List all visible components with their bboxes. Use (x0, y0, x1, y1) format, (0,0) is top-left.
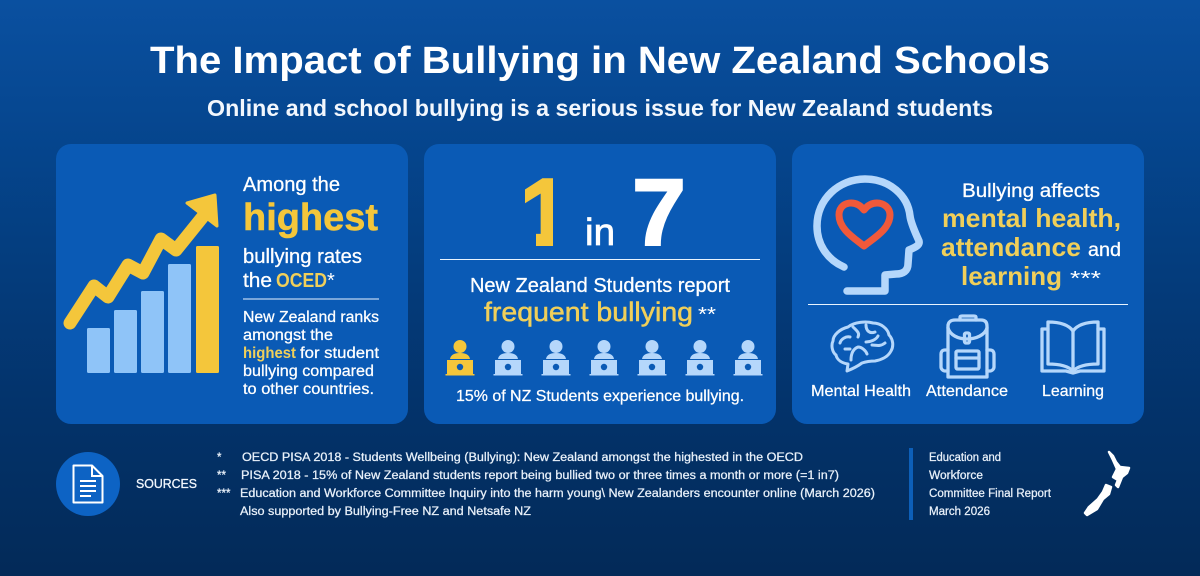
heading: affects (941, 180, 1121, 291)
statistic: 1 in 7: 1 (520, 160, 573, 266)
heading: among the highest: the (243, 270, 272, 292)
report reference (929, 452, 1052, 518)
source list: PISA 2018 - 15% of New Zealand students report being bullied two or three times a month or more (=1 in7) (241, 470, 839, 482)
heading: affects: learning (961, 261, 1062, 291)
panel: what bullying affects (792, 144, 1144, 424)
statistic: 1 in 7 (525, 178, 683, 246)
body text: ranks: for student (300, 345, 380, 362)
body text: ranks (243, 309, 380, 398)
text: frequent bullying (470, 275, 730, 327)
icon: sources document (56, 452, 120, 516)
report reference: Committee Final Report (929, 488, 1052, 500)
statistic: 1 in 7: 7 (632, 160, 686, 266)
title: The Impact of Bullying in New Zealand Schools (150, 40, 1050, 82)
body text: ranks: highest (243, 345, 296, 362)
source list: Education and Workforce Committee Inquiry into the harm young\ New Zealanders encounter online (March 2026) (240, 488, 875, 500)
source list: * (217, 452, 222, 464)
source list: *** (217, 488, 231, 500)
heading: affects: mental health, (942, 203, 1121, 233)
report reference: Education and (929, 452, 1001, 464)
body text: ranks: to other countries. (243, 381, 374, 398)
body text: ranks: amongst the (243, 327, 333, 344)
report reference: Workforce (929, 470, 983, 482)
icon labels: Mental Health (811, 383, 911, 400)
panel: highest bullying rates (56, 144, 408, 424)
icon: brain (832, 322, 893, 371)
source list: Also supported by Bullying-Free NZ and Netsafe NZ (240, 506, 531, 518)
icon labels: Learning (1042, 383, 1104, 400)
icon: New Zealand map (1085, 452, 1129, 515)
heading: affects: *** (1070, 268, 1101, 290)
heading: affects: attendance (941, 232, 1081, 262)
text: frequent bullying: ** (698, 304, 716, 326)
body text: ranks: bullying compared (243, 363, 374, 380)
text: frequent bullying: frequent bullying (484, 297, 693, 327)
source list: ** (217, 470, 226, 482)
source list (217, 452, 875, 518)
label: sources: SOURCES (136, 476, 197, 491)
icon: open book (1042, 322, 1104, 373)
heading: among the highest: highest (243, 197, 378, 239)
heading: affects: Bullying affects (962, 180, 1100, 202)
heading: among the highest: OCED (276, 270, 327, 292)
heading: among the highest (243, 174, 378, 292)
heading: among the highest: bullying rates (243, 246, 362, 268)
body text: ranks: New Zealand ranks (243, 309, 379, 326)
panel: 1 in 7 (424, 144, 776, 424)
caption: 15 percent: 15% of NZ Students experience bullying. (456, 388, 744, 405)
report reference: March 2026 (929, 506, 990, 518)
heading: among the highest: Among the (243, 174, 340, 196)
source list: OECD PISA 2018 - Students Wellbeing (Bullying): New Zealand amongst the highested in the OECD (242, 452, 803, 464)
icon labels: Attendance (926, 383, 1008, 400)
heading: among the highest: * (327, 270, 335, 292)
bar chart with rising arrow (70, 195, 219, 373)
icon labels (811, 383, 1104, 400)
icon row: seven students at laptops (446, 340, 762, 376)
subtitle: Online and school bullying is a serious issue for New Zealand students (207, 95, 993, 121)
statistic: 1 in 7: in (585, 212, 615, 254)
text: frequent bullying: New Zealand Students report (470, 275, 730, 297)
icon: backpack (941, 316, 994, 377)
heading: affects: and (1088, 239, 1121, 261)
icon: head with heart (817, 179, 919, 291)
